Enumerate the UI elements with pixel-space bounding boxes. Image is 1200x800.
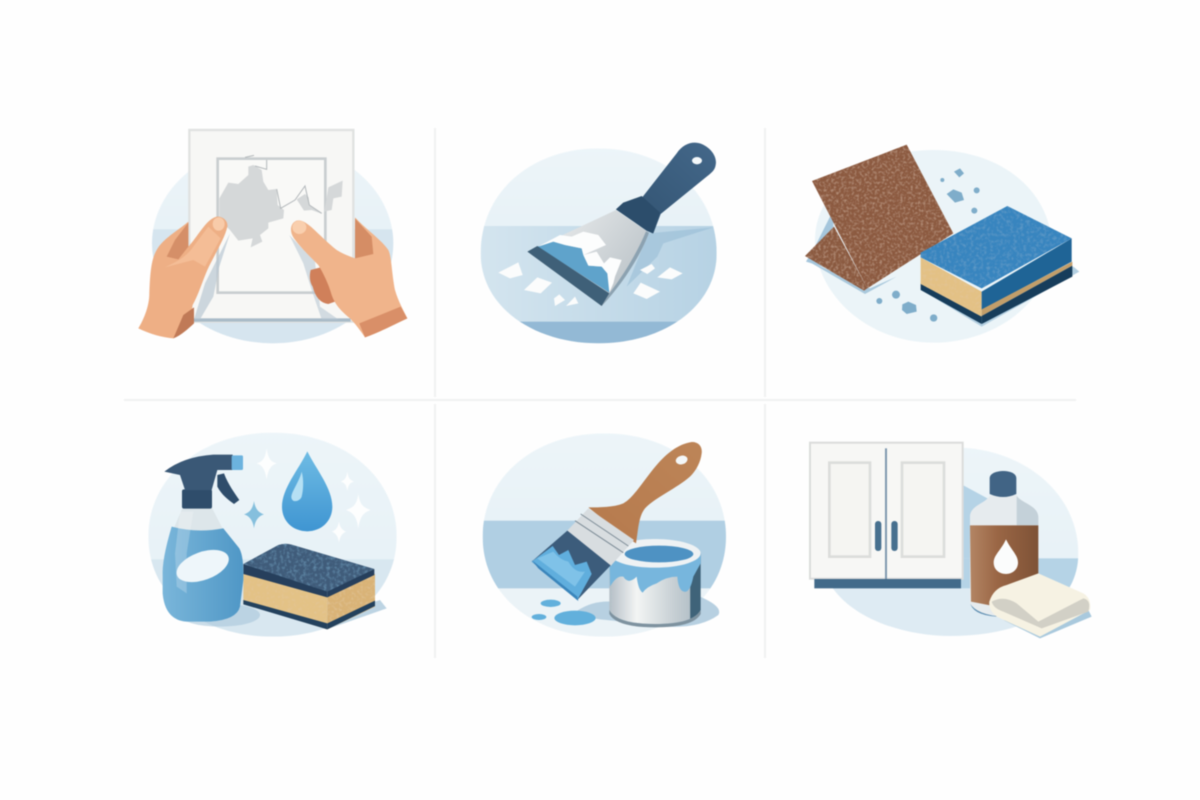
blue sanding block (921, 206, 1079, 327)
panel: finished cabinet with topcoat (810, 443, 1092, 638)
backdrop blob (820, 445, 1083, 638)
left door panel (829, 463, 870, 557)
paint flakes on floor (498, 262, 683, 306)
backdrop with floor bands (480, 147, 720, 345)
can shadow and paint puddles (532, 597, 719, 627)
backdrop with wall band (480, 430, 730, 638)
sparkles (257, 448, 371, 542)
right door panel (902, 463, 944, 557)
panel: sand surfaces (805, 145, 1079, 343)
scraper (527, 143, 716, 306)
left hand (138, 217, 227, 338)
spray head (164, 455, 233, 490)
backdrop with counter band (147, 430, 400, 639)
backdrop blob (815, 150, 1052, 343)
peeled crack middle (297, 194, 322, 214)
scraper shadow (627, 227, 713, 287)
panel: paint (480, 430, 730, 638)
blue sparkle (244, 501, 264, 528)
spray bottle (163, 455, 260, 627)
scouring sponge (243, 544, 387, 629)
cabinet shadow (963, 485, 997, 558)
panel: scrape old finish (480, 143, 720, 345)
peeled area (219, 165, 284, 247)
panel: clean and degrease (147, 430, 400, 639)
right hand (291, 217, 407, 337)
panel: inspect damaged cabinet door (138, 130, 407, 346)
cabinet (810, 443, 963, 588)
paint can (609, 539, 701, 627)
backdrop circle (152, 170, 394, 344)
bristles (532, 531, 611, 600)
handle (616, 143, 716, 233)
peeled area right (324, 181, 343, 212)
blade (527, 210, 649, 306)
folded cloth (989, 573, 1092, 638)
infographic canvas (124, 128, 1092, 658)
water drop (282, 451, 332, 531)
paint brush (532, 442, 702, 601)
paint on bristles (532, 546, 592, 600)
sandpaper sheets (805, 145, 953, 294)
cabinet door with peeling finish (189, 130, 353, 322)
paint chips on blade (538, 232, 606, 255)
finish bottle (970, 471, 1038, 617)
blue dust particles (876, 168, 980, 322)
grid dividers (124, 128, 1076, 658)
